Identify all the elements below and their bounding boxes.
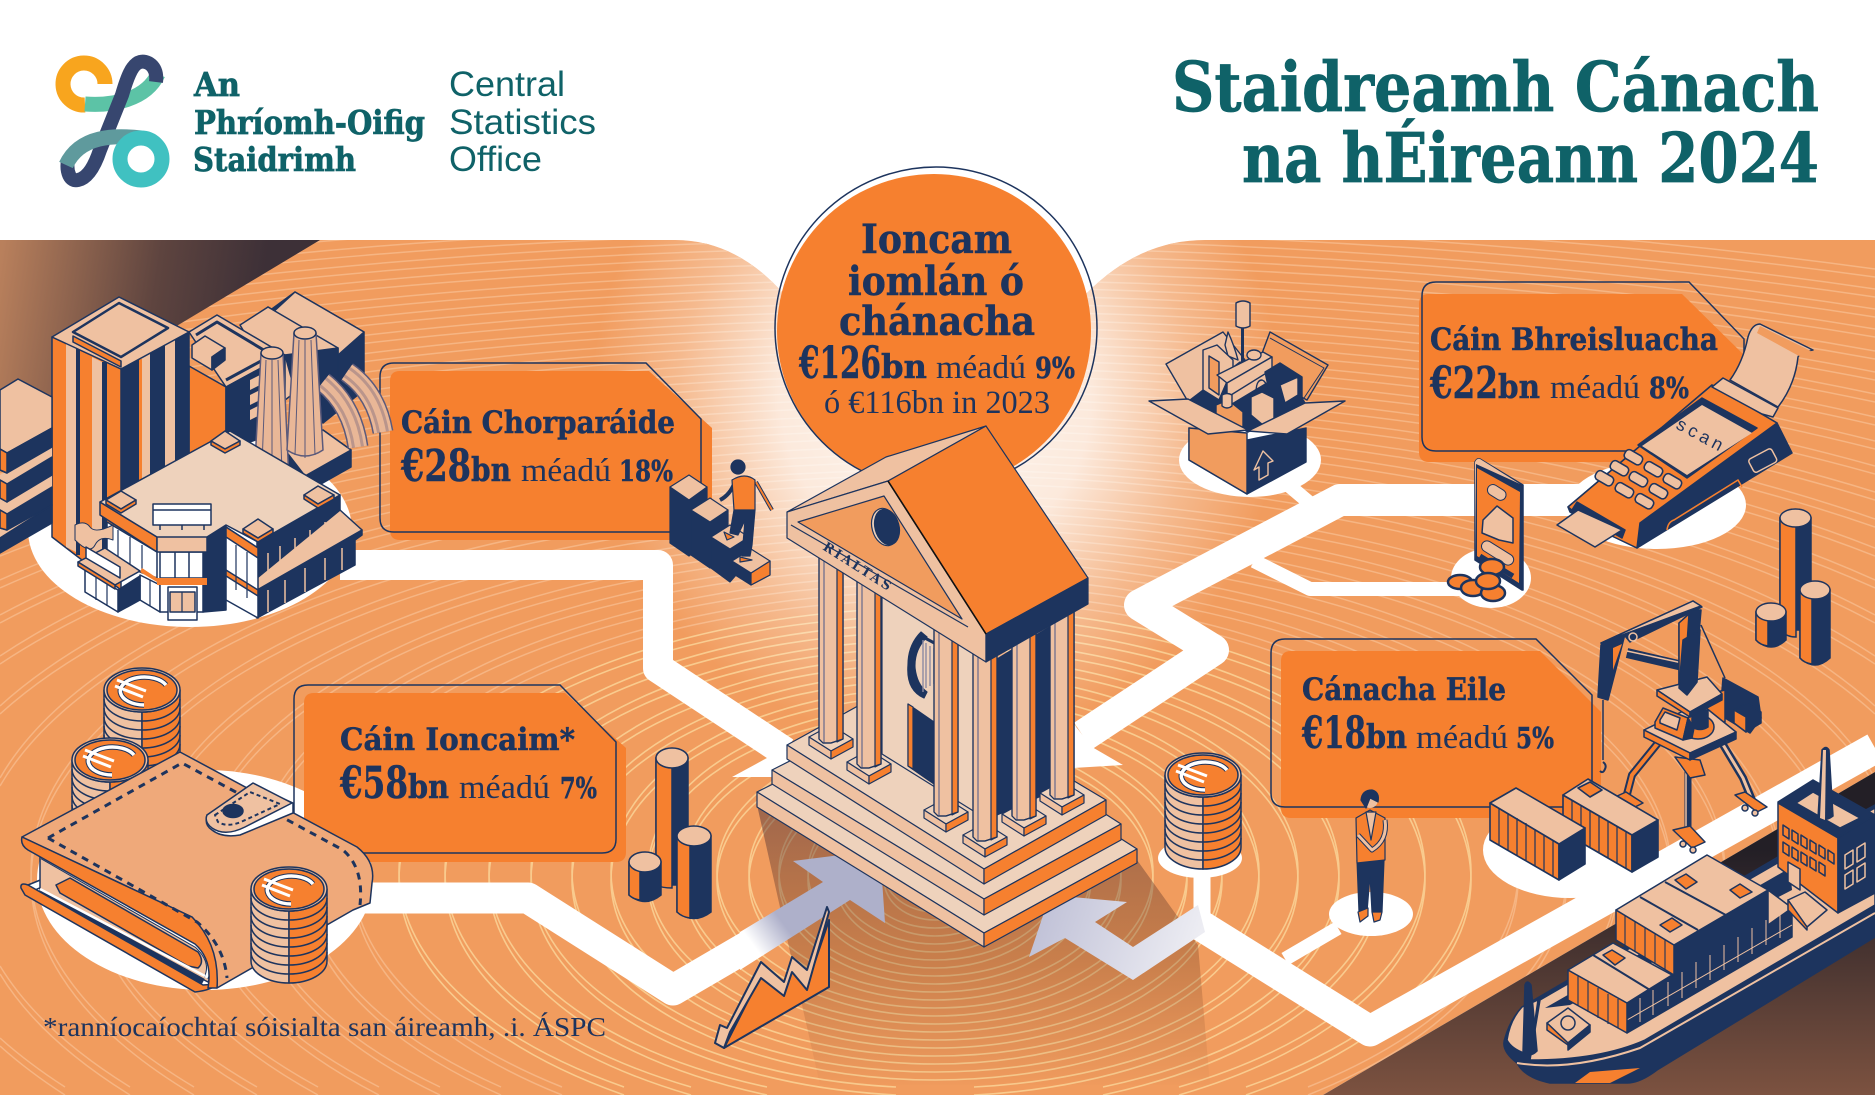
callout: VAT: méadú: [1550, 370, 1640, 406]
central bubble: total revenue: €126: [798, 338, 881, 389]
central bubble: total revenue: Ioncam: [861, 216, 1012, 263]
callout: VAT: €22: [1429, 358, 1498, 409]
callout: VAT: [1419, 282, 1744, 462]
callout: other taxes: Cánacha Eile: [1302, 672, 1506, 708]
pediment: [787, 426, 986, 662]
white spot: terminal: [1568, 461, 1746, 549]
callout: corporation tax: méadú: [521, 453, 611, 489]
harp: [908, 632, 940, 698]
callout: corporation tax: [380, 363, 712, 540]
central bubble: total revenue: méadú: [936, 350, 1026, 386]
icon: city buildings: [0, 292, 383, 620]
callout: corporation tax: 18%: [619, 454, 673, 488]
temple: government building: [757, 426, 1137, 947]
title: [1172, 48, 1819, 199]
logo wordmark Irish: Staidrimh: [193, 140, 356, 179]
icon: containers on quay: [1490, 779, 1658, 880]
logo wordmark Irish: [193, 65, 425, 179]
back wall: [882, 585, 975, 812]
callout: VAT: bn: [1498, 367, 1540, 406]
dark corner top left: [0, 240, 320, 432]
callout: income tax: €58: [339, 758, 408, 809]
icon: shipping crane: [1598, 601, 1767, 853]
callout: income tax: Cáin Ioncaim*: [340, 722, 575, 758]
icon: wallet with coins: [21, 668, 373, 992]
dark interior: [997, 612, 1074, 815]
icon: cylinders right: [1756, 509, 1830, 665]
logo wordmark English: [449, 65, 596, 179]
central bubble: total revenue: chánacha: [839, 298, 1035, 345]
icon: container ship: [1504, 748, 1875, 1083]
icon: payment terminal: [1557, 324, 1813, 548]
white spot: phone: [1451, 548, 1531, 608]
columns: [809, 543, 1084, 857]
central bubble: total revenue: bn: [881, 347, 927, 386]
icon: payment terminal: scan: [1673, 414, 1727, 455]
white spot: containers: [1483, 802, 1657, 898]
central bubble: total revenue: iomlán ó: [848, 258, 1024, 305]
white spot: wallet: [37, 770, 373, 990]
central bubble: total revenue: ó €116bn in 2023: [824, 385, 1050, 421]
central bubble: total revenue: 9%: [1035, 351, 1075, 385]
white spot: coins: [1158, 838, 1242, 878]
logo wordmark Irish: Phríomh-Oifig: [194, 103, 425, 142]
icon: climbing figure on bars: [670, 460, 772, 585]
callout: other taxes: €18: [1301, 708, 1366, 759]
white roads network: [340, 478, 1875, 1031]
callout: income tax: bn: [408, 767, 449, 806]
callout: other taxes: [1271, 639, 1601, 818]
callout: income tax: [294, 685, 626, 862]
icon: coin stack right: [1165, 753, 1241, 869]
logo wordmark Irish: An: [193, 65, 240, 104]
arrow into temple from left: [740, 850, 885, 970]
icon: growth arrow chart: [715, 907, 829, 1048]
callout: other taxes: méadú: [1416, 720, 1508, 756]
icon: small cylinders left: [629, 748, 711, 918]
callout: income tax: méadú: [459, 770, 550, 806]
arrow into temple from right: [1029, 895, 1205, 980]
callout: corporation tax: bn: [471, 450, 511, 489]
temple steps: [757, 680, 1137, 947]
central bubble: total revenue: [775, 167, 1097, 489]
callout: corporation tax: €28: [400, 441, 471, 492]
icon: person with phone: [1356, 790, 1385, 922]
footnote: *ranníocaíochtaí sóisialta san áireamh, .i. ÁSPC: [43, 1012, 606, 1042]
logo wordmark English: Office: [449, 140, 542, 179]
white spot: buildings: [28, 433, 352, 627]
roof: [888, 426, 1088, 662]
pediment: RIALTAS: [820, 540, 894, 594]
white spot: box: [1179, 423, 1321, 497]
icon: phone with coins: [1448, 459, 1523, 601]
callout: VAT: 8%: [1649, 371, 1689, 405]
temple shadow: [757, 805, 1210, 1085]
door: [908, 704, 934, 784]
logo wordmark English: Central: [449, 65, 565, 104]
callout: other taxes: 5%: [1516, 721, 1554, 755]
callout: income tax: 7%: [560, 771, 597, 805]
icon: open box with goods: [1149, 301, 1345, 494]
dark corner bottom right: [1323, 772, 1875, 1095]
white spot: person: [1329, 892, 1413, 936]
callout: VAT: Cáin Bhreisluacha: [1430, 322, 1718, 358]
callout: other taxes: bn: [1366, 717, 1407, 756]
logo: [63, 62, 162, 180]
logo wordmark English: Statistics: [449, 103, 596, 142]
callout: corporation tax: Cáin Chorparáide: [401, 405, 675, 441]
